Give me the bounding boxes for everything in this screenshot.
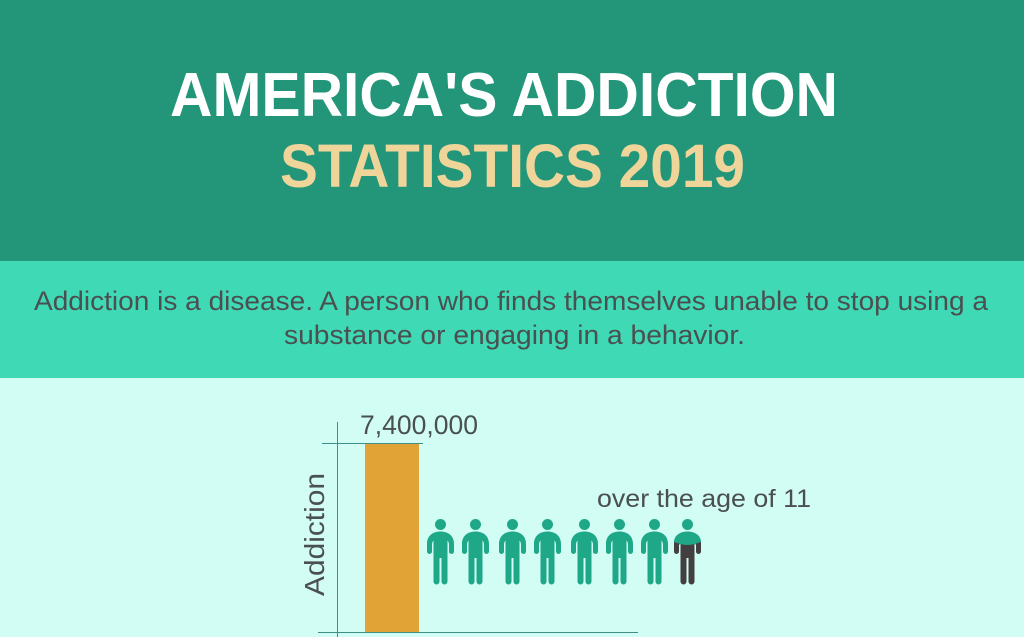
definition text line 2: substance or engaging in a behavior. <box>284 320 745 350</box>
icon: person 5 <box>571 519 598 584</box>
axis label: Addiction <box>299 473 330 596</box>
bar <box>365 444 419 632</box>
panel: definition band <box>0 261 1024 378</box>
title line 1: AMERICA'S ADDICTION <box>170 61 838 130</box>
title line 2: STATISTICS 2019 <box>280 132 745 200</box>
icon: person 3 <box>499 519 526 584</box>
definition text line 1: Addiction is a disease. A person who finds themselves unable to stop using a <box>34 286 989 316</box>
chart: addiction bar chart <box>299 410 811 637</box>
icon: person 1 <box>427 519 454 584</box>
annotation: over the age of 11 <box>597 485 811 513</box>
icon: person 6 <box>606 519 633 584</box>
panel: title header <box>0 0 1024 261</box>
icon: person 7 <box>641 519 668 584</box>
icon: person 8 partly filled dark <box>674 519 701 584</box>
icon: person 2 <box>462 519 489 584</box>
bar value: 7,400,000 <box>360 410 478 440</box>
icon: person 4 <box>534 519 561 584</box>
